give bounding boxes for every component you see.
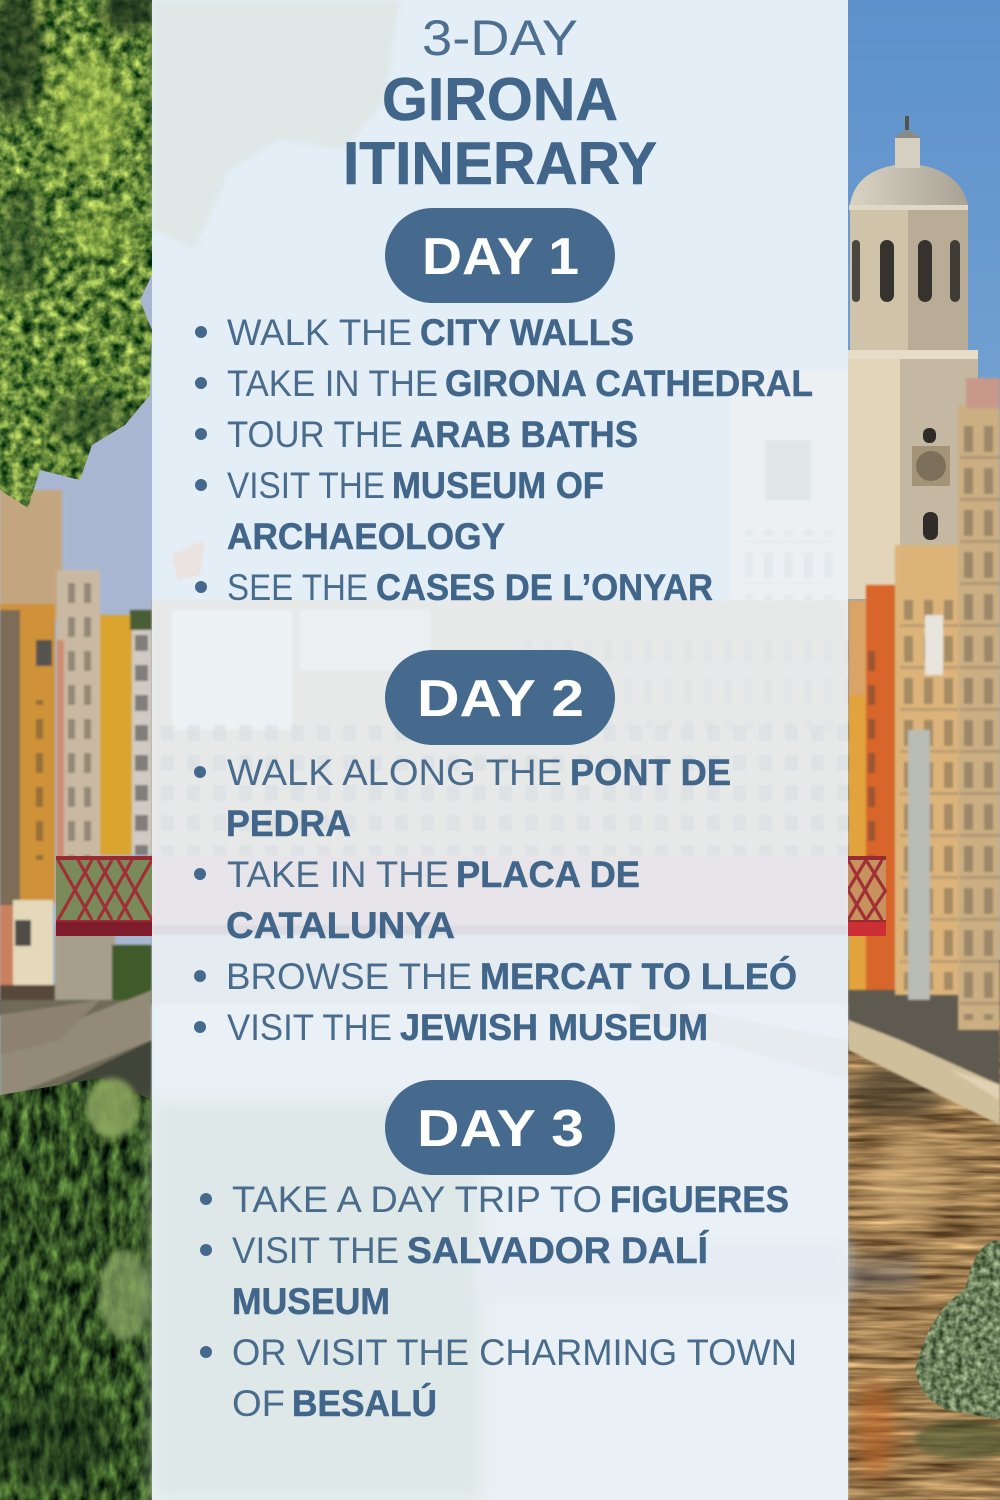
red iron bridge (56, 856, 886, 936)
title (343, 10, 657, 197)
day 2 heading pill: DAY 2 (417, 670, 584, 728)
day 3 list: MUSEUM (232, 1280, 390, 1322)
day 3 heading pill: DAY 3 (417, 1100, 584, 1158)
day 3 list (200, 1178, 797, 1424)
day 3 list: FIGUERES (610, 1178, 789, 1220)
day 1 list: SEE THE (227, 566, 368, 608)
day 1 list: MUSEUM OF (392, 464, 604, 506)
day 1 list (195, 311, 813, 608)
day 3 list: TAKE A DAY TRIP TO (232, 1178, 602, 1220)
day 2 list: PLACA DE (456, 853, 640, 895)
right side: river (848, 1020, 1000, 1500)
day 1 list: CITY WALLS (420, 311, 634, 353)
left side: river wall and water (0, 990, 152, 1110)
title: GIRONA (382, 66, 618, 133)
day 2 list (194, 751, 797, 1048)
day 1 list: TAKE IN THE (227, 362, 438, 404)
day 1 list: GIRONA CATHEDRAL (445, 362, 813, 404)
left side: riverside buildings (0, 490, 152, 1015)
title: 3-DAY (422, 10, 578, 66)
middle: town seen through the panel (152, 0, 848, 1500)
day 2 list: WALK ALONG THE (227, 751, 562, 793)
day 1 list: VISIT THE (227, 464, 385, 506)
day 2 list: TAKE IN THE (227, 853, 449, 895)
day 1 list: CASES DE L’ONYAR (376, 566, 713, 608)
day 3 list: SALVADOR DALÍ (407, 1229, 710, 1271)
right side: reeds in the river (915, 1240, 1000, 1460)
day 3 list: OF (232, 1382, 285, 1424)
day 1 list: ARAB BATHS (410, 413, 638, 455)
right side: cathedral tower (848, 116, 978, 599)
day 1 list: WALK THE (227, 311, 412, 353)
day 1 heading pill: DAY 1 (422, 228, 579, 286)
day 2 list: PEDRA (226, 802, 351, 844)
translucent central panel (152, 0, 848, 1500)
day 3 list: VISIT THE (232, 1229, 399, 1271)
day 2 list: JEWISH MUSEUM (400, 1006, 708, 1048)
day 1 list: ARCHAEOLOGY (227, 515, 505, 557)
day 1 list: TOUR THE (227, 413, 403, 455)
day 2 list: BROWSE THE (226, 955, 472, 997)
day 3 heading pill (385, 1080, 615, 1175)
day 1 heading pill (385, 208, 615, 303)
title: ITINERARY (343, 130, 657, 197)
right side: stone quay (848, 990, 1000, 1125)
day 2 list: PONT DE (570, 751, 731, 793)
left side: tree canopy (0, 0, 160, 508)
left side: grass bank (0, 1078, 152, 1500)
day 2 heading pill (385, 650, 615, 745)
day 3 list: OR VISIT THE CHARMING TOWN (232, 1331, 797, 1373)
day 2 list: MERCAT TO LLEÓ (480, 955, 797, 997)
day 2 list: VISIT THE (227, 1006, 392, 1048)
day 2 list: CATALUNYA (226, 904, 455, 946)
right side: riverside houses (848, 378, 1000, 1030)
day 3 list: BESALÚ (292, 1382, 437, 1424)
